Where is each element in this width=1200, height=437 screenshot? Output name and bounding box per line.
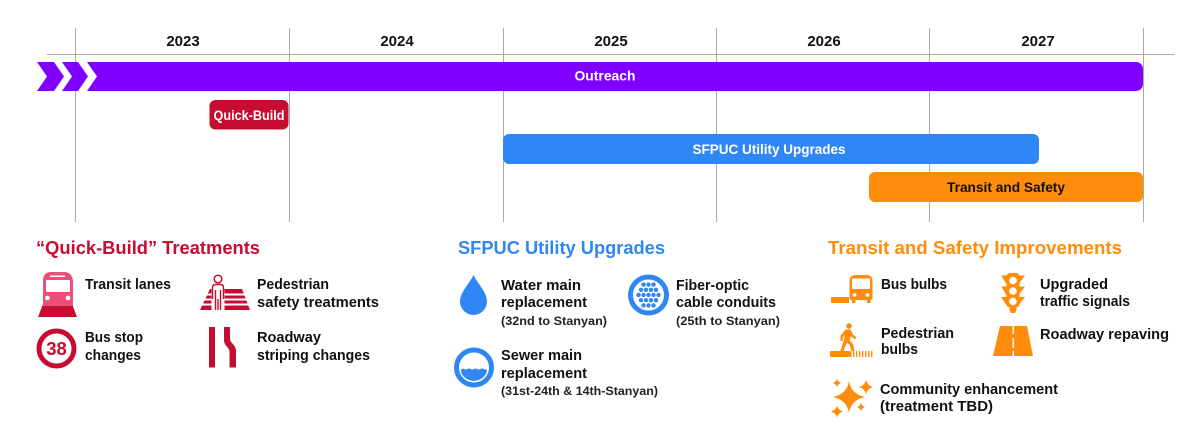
year labels: 2026 <box>807 33 841 50</box>
panel: transit and safety improvements <box>828 237 1169 418</box>
icon: roadway repaving <box>993 326 1033 356</box>
SFPUC utility upgrades bar: SFPUC Utility Upgrades <box>692 142 846 157</box>
panel: SFPUC utility upgrades: (25th to Stanyan) <box>676 314 780 328</box>
icon: pedestrian safety <box>200 275 250 310</box>
panel: SFPUC utility upgrades: (31st-24th & 14th-Stanyan) <box>501 384 658 398</box>
panel: SFPUC utility upgrades <box>456 237 780 398</box>
icon: transit lanes bus <box>38 272 77 317</box>
icon: fiber-optic cable <box>630 277 666 313</box>
label: roadway striping: Roadway <box>257 330 321 346</box>
label: community enhancement: Community enhancement <box>880 382 1058 398</box>
panel: transit and safety improvements: traffic signals <box>1040 294 1130 310</box>
icon: roadway striping <box>209 327 236 368</box>
icon: bus stop 38: 38 <box>46 338 67 359</box>
label: transit lanes: Transit lanes <box>85 277 171 293</box>
label: pedestrian bulbs: Pedestrian <box>881 326 954 342</box>
year labels <box>166 33 1055 50</box>
icon: water drop <box>460 275 487 315</box>
panel: transit and safety improvements: (treatment TBD) <box>880 399 993 415</box>
transit and safety bar: Transit and Safety <box>947 180 1065 195</box>
heading: SFPUC: SFPUC Utility Upgrades <box>458 237 665 258</box>
quick-build bar <box>210 100 288 130</box>
label: sewer main: Sewer main <box>501 348 582 364</box>
panel: SFPUC utility upgrades: replacement <box>501 295 587 311</box>
icon: sewer main <box>456 350 492 385</box>
label: bus bulbs: Bus bulbs <box>881 277 947 293</box>
label: upgraded signals: Upgraded <box>1040 277 1108 293</box>
heading: quick-build: “Quick-Build” Treatments <box>36 237 260 258</box>
icon: sparkles <box>831 379 873 418</box>
panel: quick-build treatments: safety treatments <box>257 295 379 311</box>
panel: SFPUC utility upgrades: (32nd to Stanyan) <box>501 314 607 328</box>
SFPUC utility upgrades bar <box>503 134 1039 164</box>
label: pedestrian safety: Pedestrian <box>257 277 329 293</box>
year labels: 2024 <box>380 33 414 50</box>
icon: bus stop 38 <box>39 331 74 366</box>
panel: quick-build treatments <box>36 237 379 368</box>
outreach bar: Outreach <box>574 68 636 84</box>
panel: SFPUC utility upgrades: replacement <box>501 366 587 382</box>
year labels: 2025 <box>594 33 628 50</box>
outreach bar <box>37 62 1143 91</box>
icon: traffic signal <box>1002 273 1024 313</box>
panel: SFPUC utility upgrades: cable conduits <box>676 295 776 311</box>
transit and safety bar <box>869 172 1143 202</box>
icon: pedestrian bulb <box>830 323 872 357</box>
year labels: 2023 <box>166 33 200 50</box>
label: roadway repaving: Roadway repaving <box>1040 327 1169 343</box>
icon: bus bulb <box>831 275 872 303</box>
panel: quick-build treatments: changes <box>85 348 141 364</box>
year labels: 2027 <box>1021 33 1055 50</box>
label: fiber-optic: Fiber-optic <box>676 278 749 294</box>
panel: quick-build treatments: striping changes <box>257 348 370 364</box>
heading: transit and safety: Transit and Safety Improvements <box>828 237 1122 258</box>
label: water main: Water main <box>501 278 581 294</box>
panel: transit and safety improvements: bulbs <box>881 342 918 358</box>
label: bus stop changes: Bus stop <box>85 330 143 346</box>
quick-build bar: Quick-Build <box>214 108 284 123</box>
